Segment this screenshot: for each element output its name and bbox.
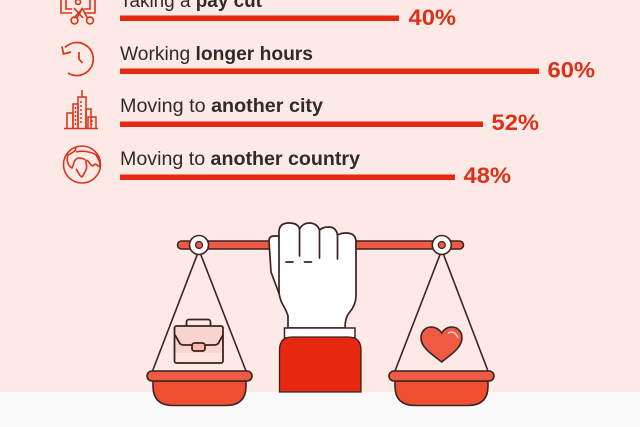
- pivot: [190, 236, 208, 254]
- value: 60%: [548, 58, 595, 82]
- pivot: [432, 236, 451, 254]
- label: Working longer hours: [120, 44, 313, 65]
- row: working longer hours: [62, 43, 595, 82]
- sleeve: [280, 337, 361, 392]
- icon: briefcase: [174, 320, 223, 363]
- value: 52%: [492, 110, 539, 135]
- icon: heart: [421, 327, 462, 362]
- row: moving to another city: [64, 90, 539, 135]
- value: 40%: [408, 5, 456, 30]
- bar: 52%: [120, 122, 483, 127]
- icon: clock with backward arrow: [62, 43, 93, 76]
- bar: 40%: [120, 16, 399, 21]
- row: taking a pay cut: [61, 0, 456, 30]
- illustration: balance scale held by a hand: [147, 223, 494, 406]
- ropes: [395, 250, 488, 371]
- bar: 48%: [120, 174, 455, 180]
- hand: [269, 223, 356, 328]
- row: moving to another country: [64, 146, 511, 188]
- pan: [389, 371, 494, 406]
- icon: globe: [64, 146, 100, 183]
- value: 48%: [464, 163, 511, 188]
- cuff: [284, 328, 355, 338]
- left scale pan with briefcase: [147, 236, 252, 406]
- icon: city skyline: [64, 90, 98, 128]
- label: Moving to another country: [120, 149, 360, 170]
- bar: 60%: [120, 68, 539, 74]
- right scale pan with heart: [389, 236, 494, 406]
- pan: [147, 371, 252, 406]
- ropes: [152, 250, 246, 371]
- scale beam: [178, 241, 464, 249]
- icon: money and scissors: [61, 0, 95, 24]
- label: Moving to another city: [120, 96, 323, 117]
